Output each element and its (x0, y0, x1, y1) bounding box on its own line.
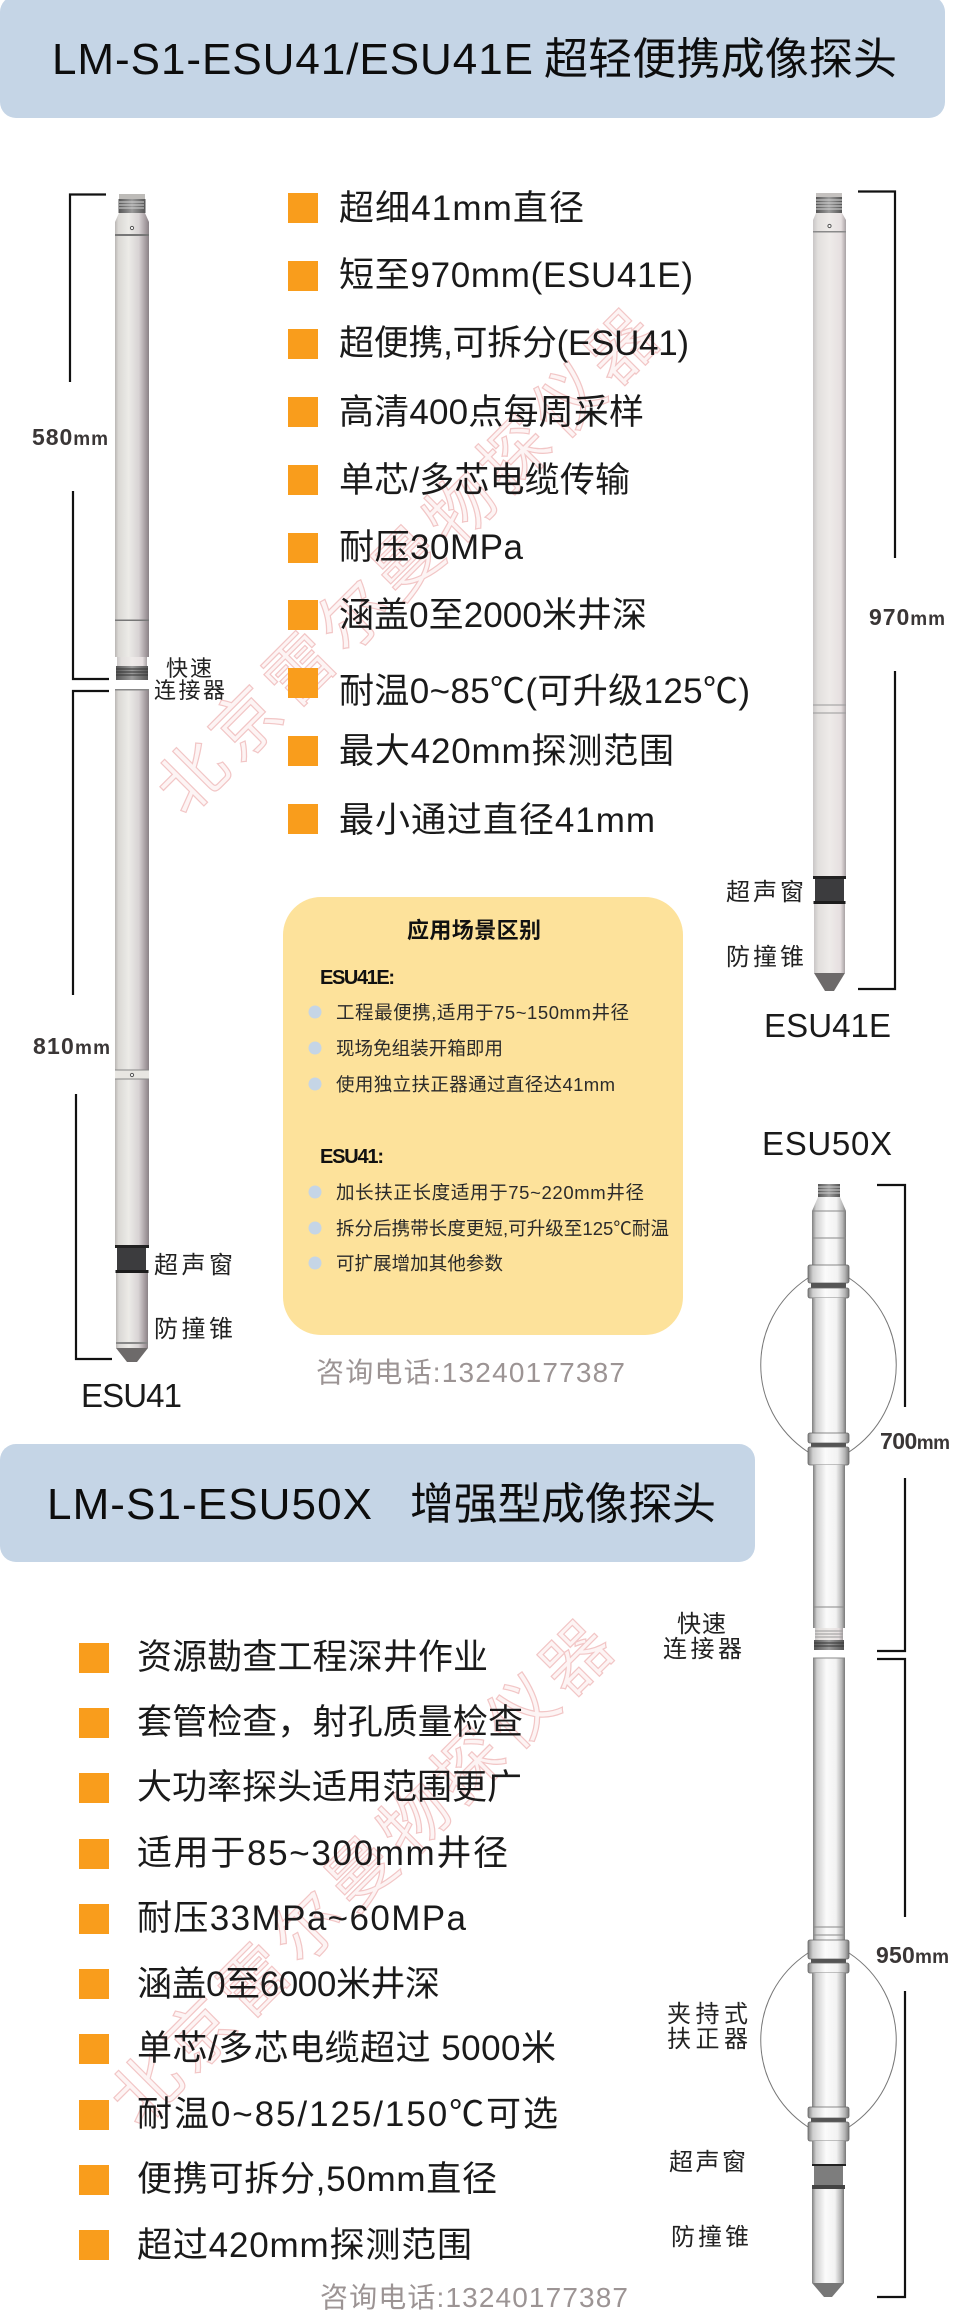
label: quick connector (154, 656, 225, 703)
feature list: ESU41 (288, 189, 750, 840)
header: ESU50X (0, 1444, 755, 1562)
feature 3: 大功率探头适用范围更广 (137, 1768, 522, 1807)
probe name: ESU50X: ESU50X (762, 1125, 892, 1162)
scenario E2: 现场免组装开箱即用 (336, 1038, 503, 1059)
probe: ESU41E (813, 193, 846, 991)
contact phone: upper: 咨询电话:13240177387 (316, 1357, 625, 1388)
feature list: ESU50X (79, 1638, 558, 2265)
dimension: 580mm: 580mm (32, 424, 108, 450)
probe name: ESU41E: ESU41E (764, 1007, 891, 1044)
label: quick connector ESU50X: 连接器 (663, 1636, 742, 1663)
label: quick connector ESU50X: 快速 (677, 1611, 726, 1638)
title: ESU50X (47, 1480, 716, 1529)
watermark: lower: 北京雷尔曼物探仪器 (96, 1608, 628, 2140)
dimension: 970mm: 970mm (869, 604, 945, 630)
label: quick connector: 快速 (166, 656, 212, 681)
label: ultrasonic window: 超声窗 (154, 1252, 233, 1279)
title: ESU41: LM-S1-ESU41/ESU41E (52, 35, 533, 84)
scenario E1: 工程最便携,适用于75~150mm井径 (336, 1002, 629, 1023)
feature 2: 短至970mm(ESU41E) (339, 256, 693, 295)
label: quick connector: 连接器 (154, 678, 225, 703)
probe name: ESU41: ESU41 (81, 1377, 182, 1414)
panel: application scenarios (283, 897, 683, 1335)
feature 6: 涵盖0至6000米井深 (137, 1965, 440, 2004)
panel heading: 应用场景区别 (407, 918, 541, 943)
dimension: 950mm (876, 1659, 949, 2297)
dimension: 810mm (33, 691, 112, 1359)
title: ESU50X: 增强型成像探头 (410, 1480, 716, 1529)
feature 10: 超过420mm探测范围 (137, 2226, 472, 2265)
feature 2: 套管检查，射孔质量检查 (137, 1703, 523, 1742)
scenario S2: 拆分后携带长度更短,可升级至125℃耐温 (336, 1218, 669, 1239)
label: ultrasonic window ESU41E: 超声窗 (726, 879, 804, 906)
dimension: 810mm: 810mm (33, 1033, 110, 1059)
scenario S3: 可扩展增加其他参数 (336, 1253, 503, 1274)
label: quick connector ESU50X (663, 1611, 742, 1663)
watermark: upper: 北京雷尔曼物探仪器 (142, 297, 674, 829)
probe: ESU50X (761, 1184, 896, 2297)
feature 9: 便携可拆分,50mm直径 (137, 2160, 497, 2199)
label: clamp centralizer: 扶正器 (667, 2026, 748, 2053)
label: cone ESU41E: 防撞锥 (726, 944, 804, 971)
title: ESU41 (52, 35, 897, 84)
feature 6: 耐压30MPa (339, 528, 524, 567)
scenario E3: 使用独立扶正器通过直径达41mm (336, 1074, 615, 1095)
feature 3: 超便携,可拆分(ESU41) (339, 324, 689, 363)
title: ESU50X: LM-S1-ESU50X (47, 1480, 372, 1529)
feature 9: 最大420mm探测范围 (339, 732, 674, 771)
dimension: 970mm (858, 192, 945, 989)
subheading: ESU41: ESU41: (320, 1146, 384, 1168)
probe: ESU41 (115, 194, 149, 1362)
dimension: 700mm (877, 1185, 950, 1651)
feature 1: 超细41mm直径 (339, 189, 584, 228)
dimension: 580mm (32, 194, 109, 679)
feature 10: 最小通过直径41mm (339, 801, 655, 840)
feature 4: 高清400点每周采样 (339, 393, 644, 432)
subheading: ESU41E: ESU41E: (320, 967, 395, 989)
feature 7: 单芯/多芯电缆超过 5000米 (137, 2029, 556, 2068)
feature 8: 耐温0~85℃(可升级125℃) (339, 672, 750, 711)
feature 5: 耐压33MPa~60MPa (137, 1899, 467, 1938)
centralizer bow springs (761, 1278, 896, 2127)
label: clamp centralizer: 夹持式 (667, 2001, 748, 2028)
header: ESU41 (0, 0, 945, 118)
feature 1: 资源勘查工程深井作业 (137, 1638, 488, 1677)
feature 5: 单芯/多芯电缆传输 (339, 461, 630, 500)
label: anti-collision cone: 防撞锥 (154, 1316, 233, 1343)
dimension: 950mm: 950mm (876, 1942, 949, 1968)
feature 7: 涵盖0至2000米井深 (339, 596, 647, 635)
label: cone ESU50X: 防撞锥 (671, 2224, 749, 2251)
scenario S1: 加长扶正长度适用于75~220mm井径 (336, 1182, 644, 1203)
dimension: 700mm: 700mm (880, 1428, 950, 1454)
feature 4: 适用于85~300mm井径 (137, 1834, 508, 1873)
label: ultrasonic window ESU50X: 超声窗 (669, 2149, 746, 2176)
title: ESU41: 超轻便携成像探头 (544, 35, 897, 84)
feature 8: 耐温0~85/125/150℃可选 (137, 2095, 558, 2134)
label: clamp centralizer (667, 2001, 748, 2053)
